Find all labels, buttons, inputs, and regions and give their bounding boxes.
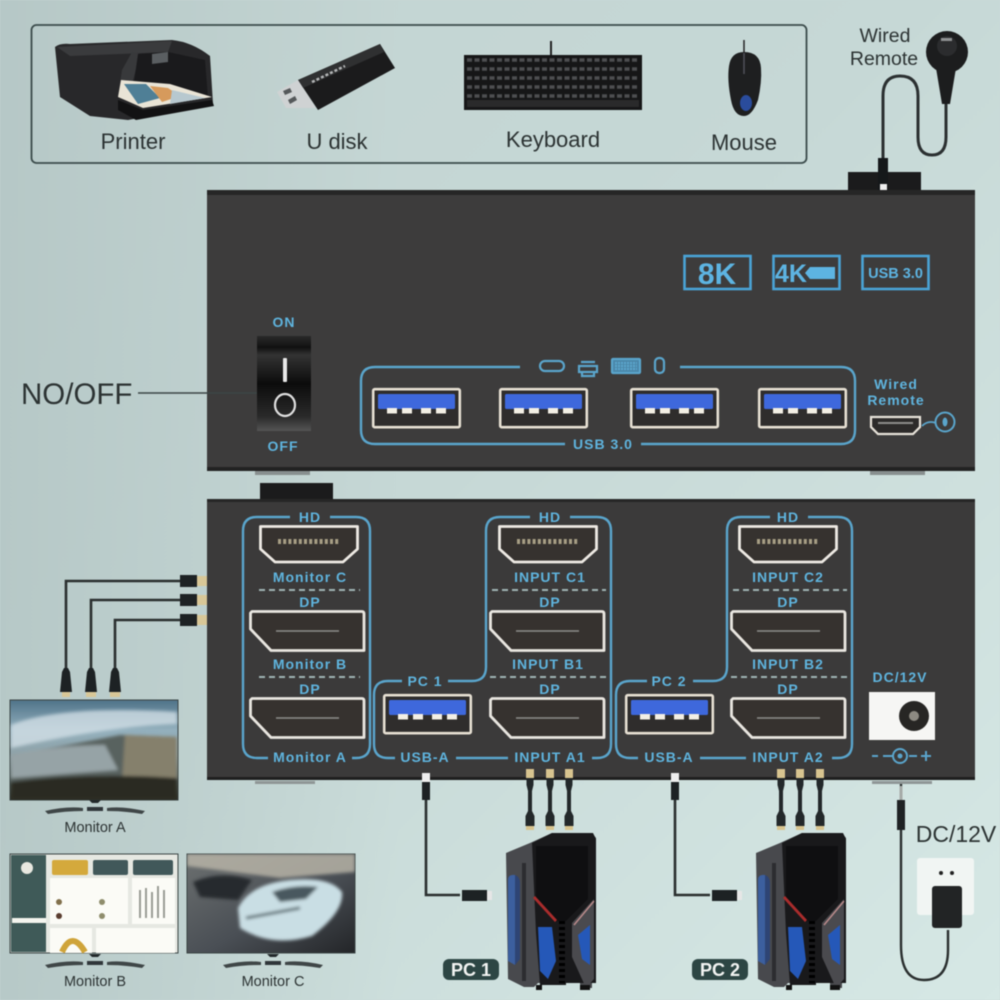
panel: USB peripherals (32, 25, 806, 163)
rear knob (260, 483, 333, 500)
badge: 4K (774, 256, 840, 289)
usb port 2 (500, 389, 587, 427)
group: PC 2 inputs: INPUT A2 (752, 749, 824, 765)
label: Printer: Printer (101, 129, 165, 154)
label ON: ON (272, 314, 296, 330)
monitor C (187, 854, 355, 990)
badge: 8K: 8K (698, 258, 737, 291)
label: Keyboard: Keyboard (506, 127, 600, 152)
label: U disk: U disk (306, 129, 369, 154)
label OFF: OFF (268, 438, 298, 454)
panel: KVM top view (207, 190, 975, 475)
icon: U disk (277, 44, 395, 110)
group: PC 1 inputs (374, 509, 611, 765)
usb port 1 (373, 389, 460, 427)
group: PC 1 inputs: PC 1 (407, 673, 443, 689)
group: PC 1 inputs: INPUT C1 (514, 569, 586, 585)
top knob and connector (848, 158, 921, 194)
icon: mouse (728, 40, 761, 116)
label: Monitor B: Monitor B (64, 974, 126, 990)
group: PC 2 inputs: INPUT B2 (752, 656, 824, 672)
usb port 3 (631, 389, 718, 427)
wall outlet (917, 858, 974, 915)
hdmi connector 2 (546, 769, 554, 830)
group: Monitor outputs: Monitor A (273, 749, 347, 765)
group: PC 1 inputs: HD (539, 509, 561, 525)
hdmi connector 3 (816, 769, 824, 830)
wired remote (850, 25, 968, 172)
group: Monitor outputs: Monitor C (273, 569, 347, 585)
group: PC 2 inputs (616, 509, 852, 765)
cables: PC 1 (422, 769, 574, 901)
badge: 4K: 4K (775, 260, 807, 288)
remote label: Wired (860, 25, 910, 47)
remote label line 2: Remote (850, 48, 918, 70)
group: Monitor outputs: Monitor B (273, 656, 347, 672)
adapter (932, 886, 962, 928)
group: PC 2 inputs: USB-A (644, 749, 694, 765)
badge: USB 3.0: USB 3.0 (868, 266, 923, 282)
group: PC 2 inputs: DP (777, 594, 799, 610)
hdmi connector 1 (776, 769, 786, 830)
icon: keyboard (464, 41, 642, 110)
power switch (257, 314, 311, 454)
PC 1 tag (443, 959, 499, 980)
label USB 3.0: USB 3.0 (573, 436, 633, 452)
wired remote port (867, 376, 954, 434)
label: Mouse: Mouse (711, 130, 777, 155)
NO/OFF callout: NO/OFF (21, 378, 132, 411)
group: Monitor outputs: HD (299, 509, 321, 525)
label DC/12V: DC/12V (916, 821, 997, 847)
badge: 8K (684, 256, 750, 291)
wired remote port: Wired (874, 376, 918, 392)
group: PC 1 inputs: INPUT A1 (514, 749, 586, 765)
badge: USB 3.0 (862, 256, 928, 289)
monitor A (10, 700, 178, 836)
panel: KVM rear view (207, 499, 975, 784)
usb port 4 (759, 389, 846, 427)
cables: PC 2 (671, 769, 824, 901)
group: PC 2 inputs: DP (777, 681, 799, 697)
group: PC 1 inputs: USB-A (400, 749, 450, 765)
icon: printer (55, 40, 214, 120)
monitor B (10, 854, 178, 990)
PC 1 tower (506, 833, 596, 990)
PC 2 tag (692, 959, 748, 980)
group: Monitor outputs: DP (299, 681, 321, 697)
DC power port: DC/12V (872, 669, 928, 685)
PC 2 tower (756, 833, 846, 990)
hdmi connector 2 (796, 769, 804, 830)
group: Monitor outputs: DP (299, 594, 321, 610)
label: Monitor A: Monitor A (64, 820, 126, 836)
hdmi connector 1 (526, 769, 534, 830)
cables: monitor outputs (60, 575, 207, 697)
group: PC 1 inputs: DP (539, 594, 561, 610)
DC power adapter and cable (897, 784, 997, 980)
DC power port (869, 669, 935, 763)
USB 3.0 port group (361, 358, 855, 452)
group: PC 1 inputs: INPUT B1 (512, 656, 584, 672)
label: Monitor C: Monitor C (242, 974, 304, 990)
PC 2 tag: PC 2 (700, 960, 740, 980)
group: Monitor outputs (243, 509, 370, 765)
PC 1 tag: PC 1 (451, 960, 491, 980)
hdmi connector 3 (564, 769, 574, 830)
group: PC 2 inputs: HD (777, 509, 799, 525)
device glyphs (540, 358, 664, 376)
remote cable (883, 76, 946, 172)
remote puck (926, 31, 968, 104)
group: PC 2 inputs: PC 2 (651, 673, 687, 689)
group: PC 2 inputs: INPUT C2 (752, 569, 824, 585)
group: PC 1 inputs: DP (539, 681, 561, 697)
wired remote port: Remote (867, 392, 925, 408)
